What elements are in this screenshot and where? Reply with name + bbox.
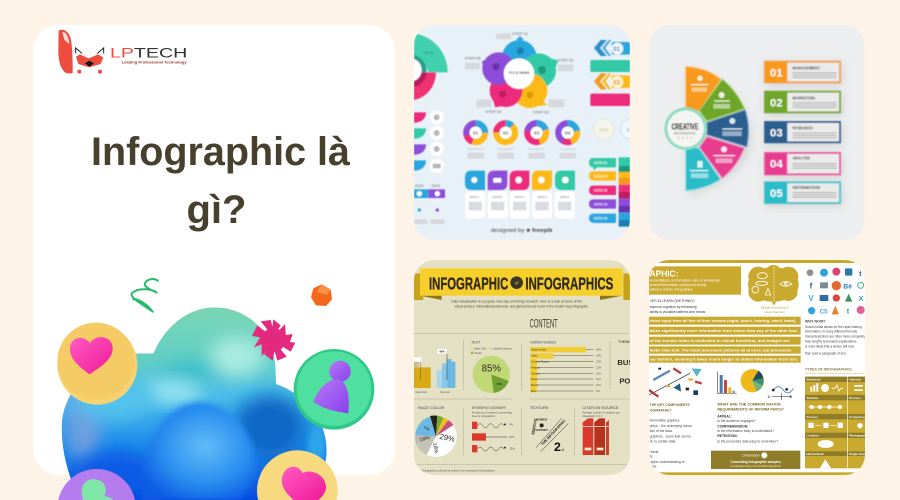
cloud body (62, 307, 327, 500)
yellow banner: of (515, 280, 519, 285)
list: 04 analysis (764, 152, 842, 177)
yellow banner: INFOGRAPHICS (525, 274, 613, 294)
pie chart: 85%: 15% (496, 382, 503, 386)
panel: creative fan infographic (649, 25, 864, 240)
types of infographics table: Location (806, 434, 819, 438)
pie chart: 85%: Base Text (475, 347, 487, 351)
why now text: information, in many different formats. (805, 330, 858, 334)
spring (131, 279, 158, 312)
footer credit box: Dimension (742, 454, 760, 458)
list: 02 marketing: 02 (770, 98, 783, 110)
fan shadow (688, 108, 753, 196)
common ratios text: APPEAL: (717, 414, 732, 418)
gold facts bars: ear fashion, meaning it takes much longer to obtain information from text. (650, 358, 798, 362)
bar chart: content sources: 12% (596, 366, 602, 370)
books: infographic: 3.17 (582, 414, 602, 418)
panel: white and gold infographic (649, 260, 869, 475)
brain cloud (748, 265, 799, 314)
social icons: Bē (843, 283, 852, 290)
gold facts bars: takes significantly more information from vision than any of the other four. (650, 329, 798, 333)
fan icons (690, 76, 742, 178)
gold facts bars: of the human brain is dedicated to visual functions, and images are (650, 339, 790, 343)
timeline: 2021 (432, 183, 441, 188)
pie chart: color: 18% (431, 442, 439, 454)
shapes collage (649, 368, 702, 397)
bar chart: content sources: News (531, 377, 538, 381)
data tags: DATA 02 (594, 174, 607, 178)
key components text: data. (650, 464, 657, 468)
bar chart: content sources: 11% (596, 377, 602, 381)
key components text: l facts. (650, 450, 659, 454)
data cards: DATA C (515, 195, 525, 199)
text treatments: TEXTURE (530, 405, 549, 410)
social icons: X (859, 294, 864, 303)
yellow banner (414, 268, 630, 300)
flower diagram: STEP 03 (533, 109, 549, 114)
data cards (465, 171, 575, 218)
panel: infographic sample, flat steps (414, 25, 630, 240)
intro text: Data visualization is a popular new way of sharing research. Here is a look at some of the (451, 300, 582, 304)
badge: purple person (58, 469, 135, 500)
list: 02 marketing (764, 91, 842, 115)
bar chart: content sources: CONTENT SOURCES (530, 339, 556, 344)
bar chart: content sources: Feature (531, 366, 541, 370)
data cards: DATA E (560, 195, 570, 199)
panel: infographic sample, flat steps: 04 (565, 131, 571, 137)
panel: infographic sample, flat steps: 03 (534, 131, 540, 137)
wave chart: iconography: INFOGRAPHIC ICONOGRAPHY (472, 405, 506, 410)
badge: green person (294, 349, 374, 430)
intro box: present information quickly and clearly (650, 283, 707, 287)
common ratios text: REQUIREMENTS OF INFORM PHICS? (717, 408, 785, 412)
bar chart: content sources: Opinion (531, 371, 541, 375)
small charts: 5 (790, 395, 792, 399)
key components text: phics – the underlying visual (650, 424, 692, 428)
key components text: tion of the data. (650, 429, 673, 433)
donut captions (467, 148, 576, 159)
bar chart: content sources: Misc (531, 389, 537, 393)
bar chart: content sources: Video (531, 354, 538, 358)
freepik credit: designed by ♣ freepik (491, 228, 553, 234)
text treatments: SERIOUS (531, 418, 538, 435)
why now text: is more likely that a viewer will look (805, 344, 854, 348)
key components text: ts. (650, 454, 653, 458)
common ratios text: Is the information easy to understand? (717, 429, 774, 433)
badge: yellow heart (57, 323, 137, 405)
footer credit box: emeldalearning.com/toolkit/infographic (730, 464, 782, 468)
types of infographics table: Statistical (806, 378, 821, 382)
list: 03 research (764, 121, 842, 146)
bar chart: content sources: 11% (596, 383, 602, 387)
list: 03 research: RESEARCH (793, 126, 813, 131)
key components text: graphics... icons that can be (650, 434, 691, 438)
social icons: f (810, 281, 813, 290)
common ratios text: COMPREHENSION: (717, 424, 748, 428)
social icons: C5 (820, 308, 828, 315)
text treatments: of (561, 448, 564, 452)
bar chart: content sources: Brand (531, 383, 539, 387)
bar chart: content sources: 13% (596, 360, 602, 364)
bar chart: content sources: 11% (596, 371, 602, 375)
bar chart: content sources: 9% (596, 389, 600, 393)
body heading: VES IN LEARN (WETHINK)? (650, 299, 695, 303)
common ratios text: RETENTION: (717, 434, 738, 438)
body heading: Improve cognition by enhancing (650, 305, 697, 309)
data tags: DATA 03 (594, 189, 607, 193)
social icons: V (808, 294, 814, 303)
list: 01 management: MANAGEMENT (793, 65, 820, 70)
social icons (807, 268, 865, 316)
big words at right edge: PO (619, 376, 630, 385)
why now text: WHY NOW? (805, 320, 826, 324)
why now text: than read a paragraph of text. (805, 351, 847, 355)
pie chart: color: 29% (439, 432, 456, 444)
data tags: DATA 04 (594, 202, 607, 206)
panel: infographic sample, flat steps: 01 (473, 131, 479, 137)
dashed separators (414, 334, 630, 464)
big words at right edge: THEME (618, 340, 631, 344)
illustration: 3D cloud with badges (57, 279, 374, 500)
half donut: 75% (423, 51, 434, 57)
center hub (664, 107, 707, 150)
list: 04 analysis: ANALYSIS (793, 156, 810, 161)
bar chart: content sources: 48% (596, 348, 602, 352)
text treatments: THE INFOGRAPHIC (540, 419, 567, 446)
why now text: than lengthy text-based explanations. (805, 339, 857, 343)
text treatments: SUPPORT (535, 428, 548, 432)
key components text (650, 403, 692, 468)
pie chart: 85% (471, 340, 512, 393)
brain cloud: faster than text (765, 310, 785, 314)
fan segments (686, 67, 748, 191)
intro box (649, 266, 741, 295)
bar chart: content sources: Content Report (531, 360, 549, 364)
types of infographics table: Process (849, 396, 861, 400)
panel: infographic of infographics: CONTENT (530, 317, 558, 331)
orange gem (311, 284, 332, 306)
percent seals: 75% (599, 128, 609, 134)
common ratios text: Is the audience engaged? (717, 419, 756, 423)
intro box: patterns, trends, infographics (650, 288, 693, 292)
gold rules (649, 260, 865, 263)
social icons: t (847, 307, 850, 316)
flower diagram: STEP 02 (557, 57, 574, 62)
percent seals (592, 118, 630, 140)
wave chart: iconography: Frequency of waves & connecting (472, 410, 512, 414)
types of infographics table: TYPES OF INFOGRAPHICS (805, 366, 852, 371)
pie chart: color (415, 405, 457, 457)
social icons: t (859, 269, 862, 278)
list: 04 analysis: 04 (770, 159, 783, 171)
pie chart: 85%: Labeled Section (493, 347, 512, 351)
heading (91, 130, 351, 232)
list: 05 information (764, 181, 842, 206)
types of infographics table: Hierarchical (806, 452, 824, 456)
percent seals: 5 (627, 128, 630, 134)
bar chart: content sources: 24% (596, 354, 602, 358)
wave chart: iconography: 9% (509, 422, 514, 426)
list: 03 research: 03 (770, 128, 783, 140)
flower diagram: TITLE HERE (508, 71, 530, 75)
flower diagram: STEP 01 (512, 31, 529, 36)
types of infographics table: Comparison (849, 415, 867, 419)
types of infographics table: Process (806, 415, 818, 419)
text treatments: WOMEN (536, 418, 547, 422)
flower diagram: STEP 05 (465, 56, 481, 61)
heading: Infographic là (91, 130, 351, 174)
pie chart: 85%: TEXT (471, 340, 481, 344)
pie chart: 85%: 85% (482, 364, 501, 375)
center hub: INFOGRAPHIC (674, 131, 696, 135)
list: 02 marketing: MARKETING (793, 95, 816, 100)
key components text: nt, to certain data. (650, 440, 676, 444)
key components text: informative graphics (650, 419, 680, 423)
common ratios text: Is the presented data easy to remember? (717, 439, 778, 443)
intro box: presentations of information, data or knowledge (650, 278, 720, 282)
brain cloud: Design processing is (761, 305, 789, 309)
big words at right edge (618, 340, 630, 384)
bar chart: content sources (530, 339, 602, 393)
pie chart: color: 7% (423, 425, 430, 432)
intro box: APHIC: (650, 268, 678, 278)
types of infographics table: Informat (849, 378, 861, 382)
why now text (805, 320, 866, 355)
list: 01 management: 01 (770, 68, 783, 80)
small charts (718, 369, 793, 400)
small charts: 3 (768, 395, 770, 399)
intro text: visual devices, informational elements, and general trends found in the modern day infographic. (455, 305, 589, 309)
pie chart: color: 18% (419, 435, 431, 444)
books (582, 405, 620, 455)
bar chart: building columns: Data Visit (415, 390, 427, 394)
why now text: Visual depictions are often more compelling (805, 335, 866, 339)
right ribbons: 01 (613, 47, 621, 53)
gold facts bars: sides input from all five of their senses (sight, touch, hearing, smell, taste), (650, 319, 796, 323)
panel: title card (33, 25, 395, 475)
list: 01 management (764, 61, 842, 85)
text treatments (530, 405, 568, 454)
text treatments: 2 (554, 440, 561, 454)
body heading: ability to visualize patterns and trends (650, 310, 706, 314)
books: CITATION SOURCE (582, 405, 619, 410)
key components text: THE KEY COMPONENTS (650, 403, 690, 407)
logo: LPTech: LPTECH (110, 44, 187, 60)
half donut (414, 34, 448, 101)
panel: infographic of infographics (414, 260, 634, 475)
logo: LPTech (58, 30, 188, 74)
books: Average number of citations per (582, 410, 620, 414)
gold facts bars (649, 317, 801, 363)
timeline (414, 183, 445, 224)
data tags: DATA 01 (594, 161, 607, 165)
left tabs and icons (414, 110, 444, 173)
data cards: DATA A (470, 195, 479, 199)
timeline: 2020 (415, 183, 425, 188)
types of infographics table (805, 366, 869, 468)
bar chart: content sources: Social media (531, 348, 547, 352)
common ratios text: WHAT ARE THE COMMON RATION (717, 403, 781, 407)
logo: LPTech: Leading Professional Technology (122, 60, 188, 64)
common ratios text (717, 403, 785, 443)
center hub: CREATIVE (672, 122, 699, 131)
list: 05 information: INFORMATION (793, 185, 821, 190)
intro text (451, 300, 589, 309)
footer credit box: Consulting Infographic samples (730, 460, 781, 464)
right ribbons (590, 40, 630, 106)
list: 05 information: 05 (770, 188, 783, 200)
key components text: OGRAPHIC? (650, 408, 672, 412)
wave chart: iconography: lines in infographics (472, 414, 496, 418)
pink flower (252, 319, 295, 361)
four donuts (466, 123, 577, 142)
data tags: DATA 05 (594, 216, 607, 220)
pie chart: color: RACE COLOR (418, 405, 444, 410)
yellow banner: INFOGRAPHIC (429, 274, 509, 294)
right ribbons: 03 (613, 80, 621, 86)
data cards: DATA D (537, 195, 547, 199)
footnote: *Infographics collected at random from www.good.is/infographics (422, 468, 496, 472)
data tags (589, 157, 630, 227)
wave chart: iconography: 13% (509, 447, 515, 451)
flower diagram (465, 31, 574, 114)
data cards: DATA B (493, 195, 502, 199)
footer credit box (711, 451, 800, 469)
bar chart: building columns (414, 349, 455, 394)
bar chart: building columns: 48% (439, 349, 445, 353)
panel: infographic sample, flat steps: 02 (503, 131, 509, 137)
why now text: Social media allows for the rapid sharing (805, 325, 862, 329)
body heading (650, 299, 706, 314)
wave chart: iconography: 48% (509, 435, 515, 439)
gold facts bars: faster than text. The brain processes pictures all at once, but processes (650, 348, 791, 352)
big words at right edge: BUS (617, 358, 634, 367)
types of infographics table: Photographic (849, 434, 869, 438)
key components text: raphic understanding of (650, 460, 685, 464)
heading: gì? (187, 188, 246, 232)
pie chart: 85%: Small (475, 351, 482, 355)
types of infographics table: Single chart (849, 452, 866, 456)
bar chart: building columns: Survival (440, 390, 450, 394)
flower diagram: STEP 04 (485, 109, 502, 114)
badge: pale yellow heart (257, 450, 338, 500)
types of infographics table: Timeline (806, 396, 819, 400)
wave chart: iconography (472, 405, 515, 452)
